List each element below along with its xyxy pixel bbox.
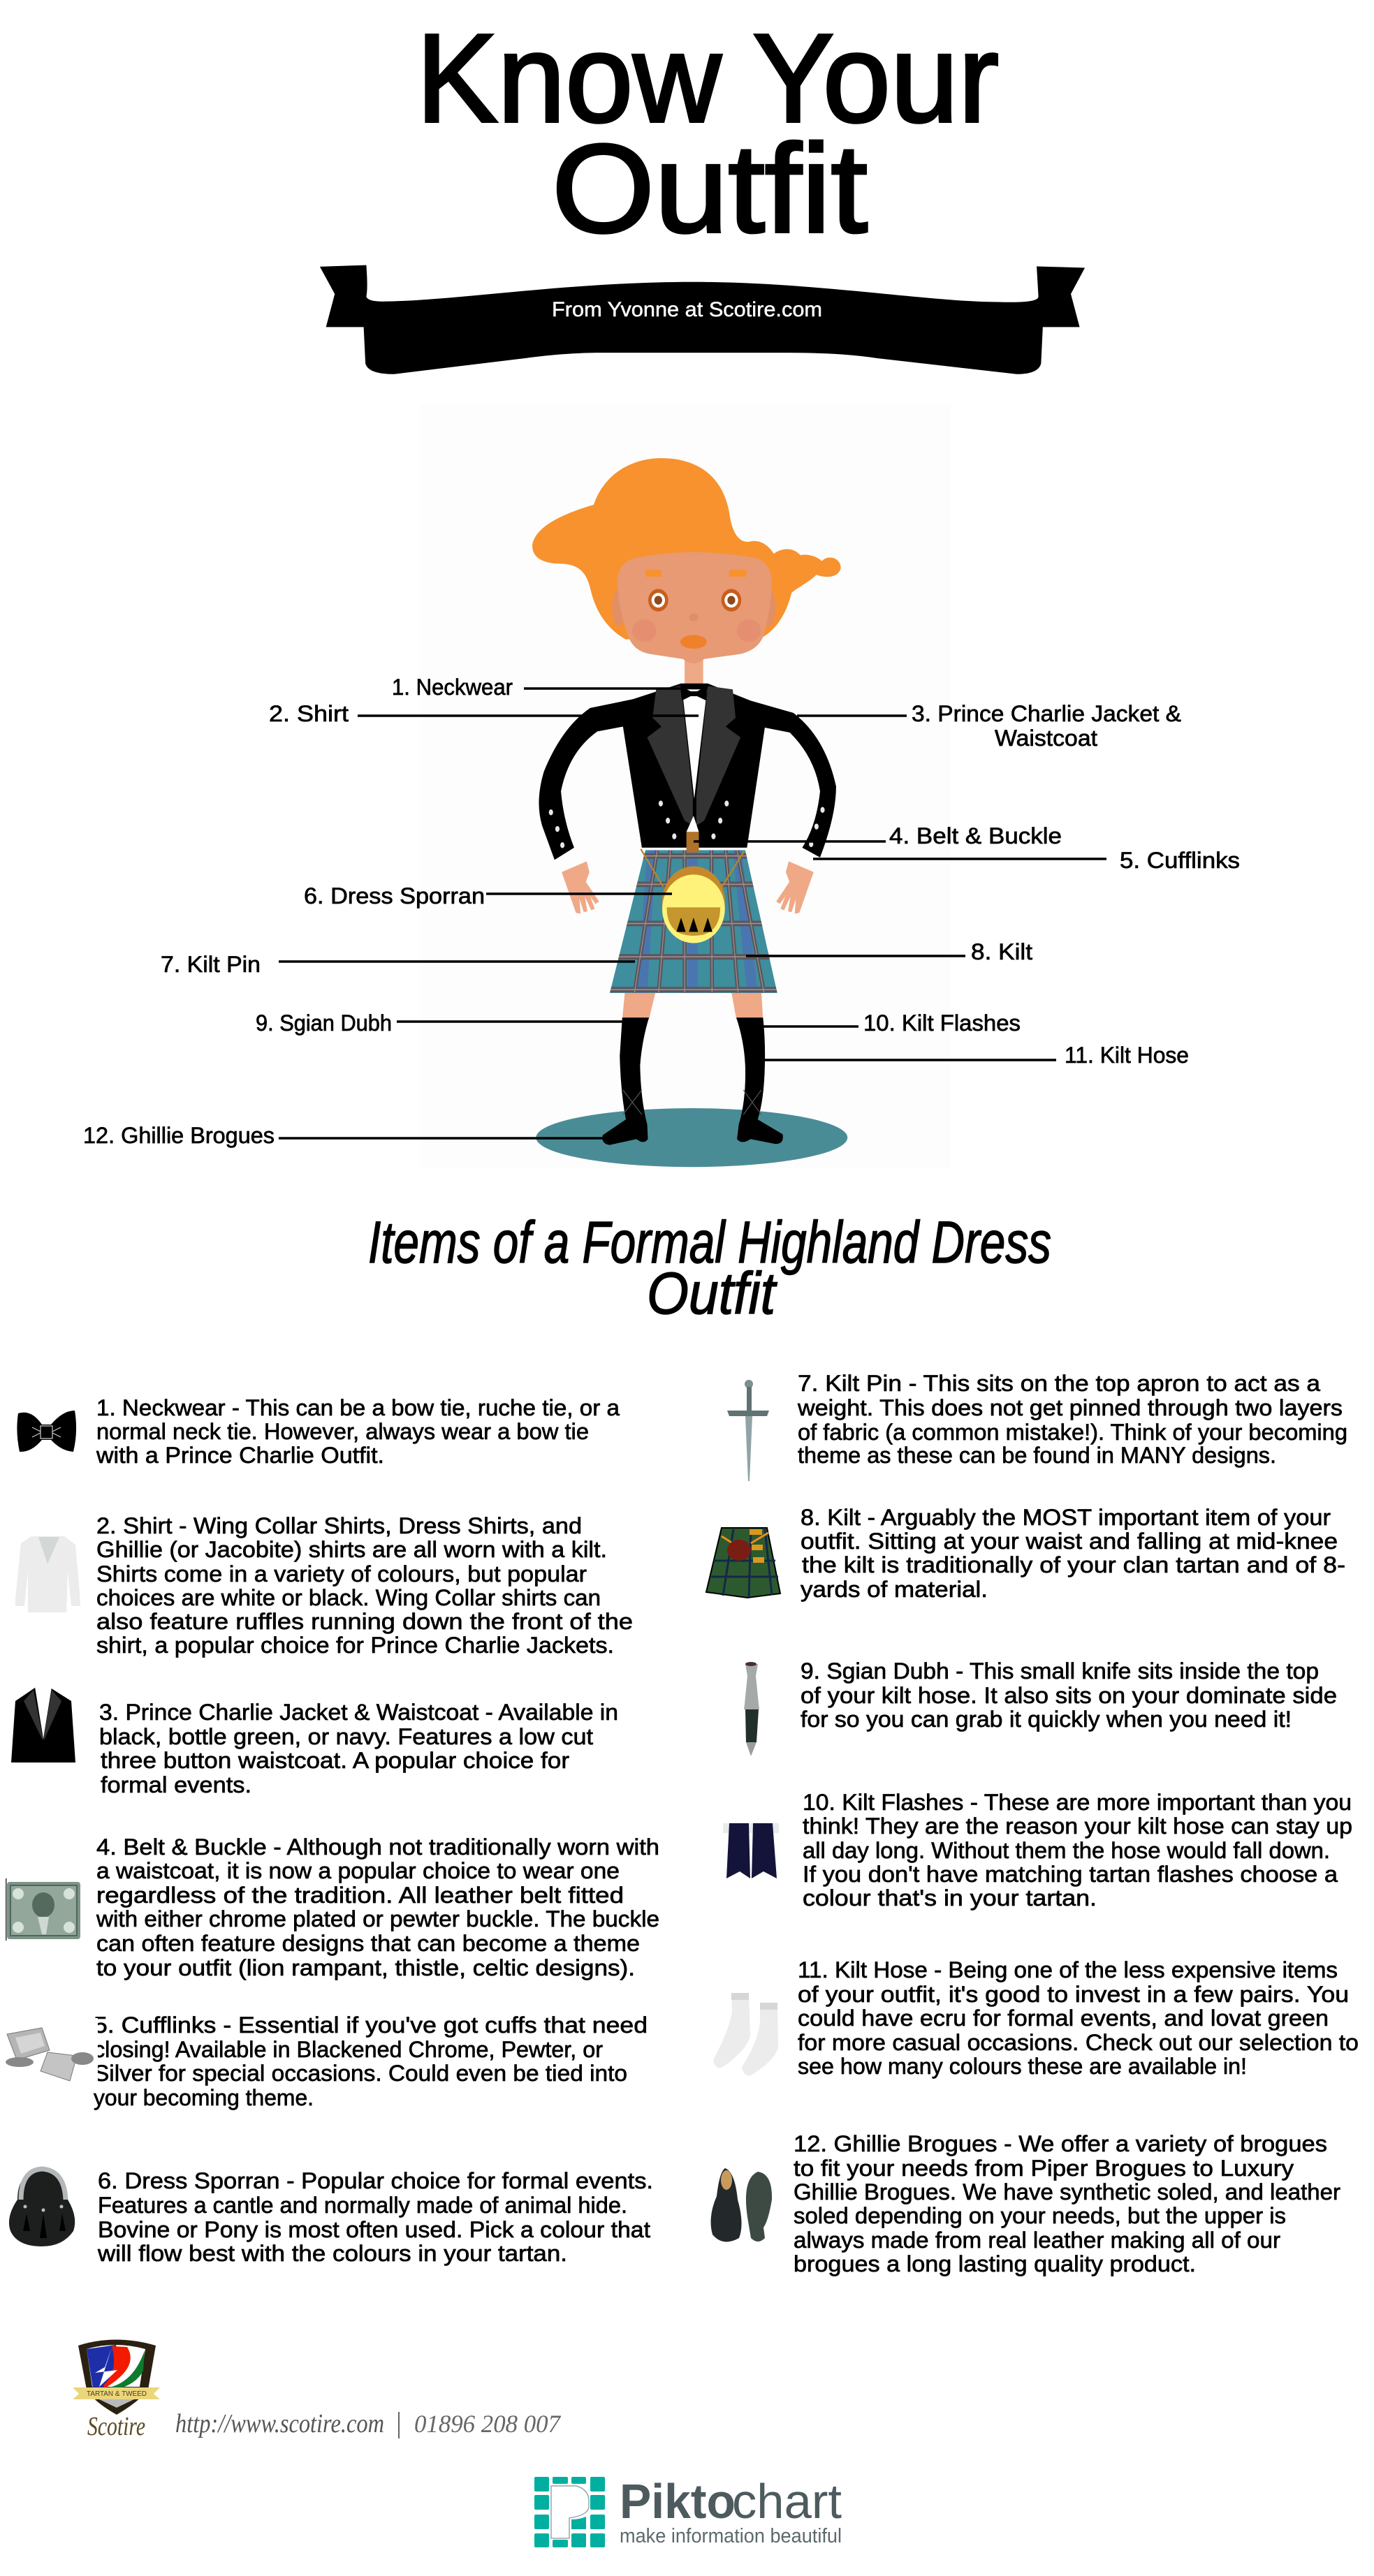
item 11: kilt hose: could have ecru for formal events, and lovat green bbox=[798, 2005, 1329, 2031]
item 12: ghillie brogues: brogues a long lasting quality product. bbox=[794, 2251, 1196, 2276]
label: 4. Belt & Buckle: 4. Belt & Buckle bbox=[889, 823, 1062, 848]
label: 3. Prince Charlie Jacket & Waistcoat: Waistcoat bbox=[995, 726, 1097, 751]
cheeks bbox=[632, 619, 657, 642]
ground shadow bbox=[536, 1108, 847, 1167]
item 2: shirt: shirt, a popular choice for Prince Charlie Jackets. bbox=[96, 1633, 614, 1658]
waistcoat point bbox=[687, 816, 699, 832]
item 4: belt and buckle: to your outfit (lion rampant, thistle, celtic designs). bbox=[96, 1955, 635, 1980]
item 6: dress sporran: Features a cantle and normally made of animal hide. bbox=[98, 2193, 627, 2218]
icon: shirt bbox=[15, 1536, 80, 1612]
bow tie bbox=[680, 686, 707, 700]
item 1: neckwear: with a Prince Charlie Outfit. bbox=[96, 1443, 384, 1468]
scotire logo: TARTAN & TWEED bbox=[87, 2390, 147, 2398]
item 12: ghillie brogues: soled depending on your needs, but the upper is bbox=[794, 2203, 1286, 2228]
item 2: shirt: Shirts come in a variety of colours, but popular bbox=[96, 1561, 587, 1587]
label: 7. Kilt Pin: 7. Kilt Pin bbox=[161, 952, 261, 977]
item 4: belt and buckle: 4. Belt & Buckle - Although not traditionally worn with bbox=[96, 1834, 659, 1860]
icon: bow tie bbox=[17, 1411, 76, 1452]
label: 3. Prince Charlie Jacket & Waistcoat bbox=[797, 701, 1181, 751]
label: 12. Ghillie Brogues: 12. Ghillie Brogues bbox=[83, 1123, 275, 1148]
icon: sporran bbox=[9, 2169, 75, 2246]
contact line bbox=[175, 2409, 562, 2438]
label: 3. Prince Charlie Jacket & Waistcoat: 3. Prince Charlie Jacket & bbox=[912, 701, 1181, 726]
item 9: sgian dubh: for so you can grab it quickly when you need it! bbox=[801, 1707, 1292, 1732]
nose and mouth bbox=[689, 613, 698, 621]
ears bbox=[613, 589, 625, 626]
wordmark: chart bbox=[732, 2474, 842, 2529]
lapels bbox=[648, 686, 740, 825]
section heading bbox=[368, 1209, 1051, 1326]
item 2: shirt: Ghillie (or Jacobite) shirts are all worn with a kilt. bbox=[96, 1537, 607, 1562]
item 2: shirt bbox=[15, 1513, 633, 1658]
face bbox=[617, 552, 772, 663]
kilt bbox=[608, 848, 779, 994]
item 5: cufflinks: Silver for special occasions. Could even be tied into bbox=[94, 2061, 627, 2086]
item 9: sgian dubh bbox=[744, 1658, 1337, 1756]
item 7: kilt pin: theme as these can be found in MANY designs. bbox=[798, 1443, 1276, 1468]
item 9: sgian dubh: 9. Sgian Dubh - This small knife sits inside the top bbox=[801, 1658, 1319, 1684]
item 6: dress sporran: Bovine or Pony is most often used. Pick a colour that bbox=[98, 2217, 650, 2242]
banner bbox=[320, 265, 1085, 374]
item 1: neckwear bbox=[17, 1395, 620, 1468]
scotire logo: Scotire bbox=[87, 2412, 145, 2441]
label: 10. Kilt Flashes: 10. Kilt Flashes bbox=[863, 1010, 1021, 1036]
buttons bbox=[549, 800, 825, 848]
sporran bbox=[641, 849, 744, 887]
item 8: kilt: outfit. Sitting at your waist and falling at mid-knee bbox=[801, 1529, 1338, 1554]
item 3: jacket: black, bottle green, or navy. Features a low cut bbox=[99, 1724, 593, 1749]
item 12: ghillie brogues: Ghillie Brogues. We have synthetic soled, and leather bbox=[794, 2179, 1340, 2205]
figure backdrop panel bbox=[421, 404, 951, 1169]
item 2: shirt: also feature ruffles running down the front of the bbox=[96, 1609, 633, 1634]
item 5: cufflinks: 5. Cufflinks - Essential if you've got cuffs that need bbox=[94, 2012, 648, 2038]
label: 11. Kilt Hose: 11. Kilt Hose bbox=[1065, 1043, 1189, 1068]
item 12: ghillie brogues: 12. Ghillie Brogues - We offer a variety of brogues bbox=[794, 2131, 1327, 2156]
item 1: neckwear: normal neck tie. However, always wear a bow tie bbox=[96, 1419, 589, 1444]
icon: piktochart mark bbox=[534, 2477, 605, 2547]
item 12: ghillie brogues: to fit your needs from Piper Brogues to Luxury bbox=[794, 2156, 1294, 2181]
item 10: kilt flashes: colour that's in your tartan. bbox=[803, 1885, 1097, 1911]
item 11: kilt hose bbox=[713, 1957, 1359, 2079]
label: 6. Dress Sporran: 6. Dress Sporran bbox=[304, 883, 485, 908]
item 5: cufflinks bbox=[0, 2012, 648, 2110]
contact line: 01896 208 007 bbox=[414, 2410, 562, 2438]
shirt front bbox=[682, 689, 707, 799]
item 12: ghillie brogues bbox=[711, 2131, 1340, 2276]
item 2: shirt: choices are white or black. Wing Collar shirts can bbox=[96, 1585, 601, 1610]
item 4: belt and buckle: regardless of the tradition. All leather belt fitted bbox=[96, 1883, 624, 1908]
item 10: kilt flashes: 10. Kilt Flashes - These are more important than you bbox=[803, 1790, 1352, 1815]
icon: belt buckle bbox=[6, 1878, 80, 1941]
item 8: kilt bbox=[706, 1505, 1345, 1602]
contact line: http://www.scotire.com bbox=[175, 2409, 384, 2438]
hair bbox=[532, 458, 841, 640]
item 10: kilt flashes bbox=[723, 1790, 1352, 1911]
title: Know Your bbox=[416, 8, 999, 149]
title bbox=[416, 8, 999, 259]
item 11: kilt hose: of your outfit, it's good to invest in a few pairs. You bbox=[798, 1982, 1349, 2007]
eyes bbox=[648, 589, 668, 612]
wordmark: Pikto bbox=[620, 2474, 736, 2529]
item 9: sgian dubh: of your kilt hose. It also sits on your dominate side bbox=[801, 1683, 1337, 1708]
item 3: jacket: 3. Prince Charlie Jacket & Waistcoat - Available in bbox=[99, 1700, 618, 1725]
wordmark bbox=[620, 2474, 842, 2547]
icon: prince charlie jacket bbox=[11, 1687, 75, 1762]
icon: kilt flashes bbox=[723, 1823, 779, 1878]
item 11: kilt hose: see how many colours these are available in! bbox=[798, 2054, 1247, 2079]
item 8: kilt: yards of material. bbox=[801, 1577, 988, 1602]
item 4: belt and buckle bbox=[6, 1834, 659, 1980]
item 2: shirt: 2. Shirt - Wing Collar Shirts, Dress Shirts, and bbox=[96, 1513, 582, 1538]
scotire logo bbox=[73, 2339, 160, 2441]
title: Outfit bbox=[552, 119, 868, 259]
legs bbox=[622, 989, 763, 1019]
item 1: neckwear: 1. Neckwear - This can be a bow tie, ruche tie, or a bbox=[96, 1395, 620, 1420]
label: 2. Shirt: 2. Shirt bbox=[269, 701, 349, 726]
section heading: Outfit bbox=[647, 1260, 777, 1326]
item 10: kilt flashes: think! They are the reason your kilt hose can stay up bbox=[803, 1813, 1352, 1839]
item 6: dress sporran: will flow best with the colours in your tartan. bbox=[97, 2241, 567, 2266]
item 10: kilt flashes: all day long. Without them the hose would fall down. bbox=[803, 1838, 1330, 1863]
item 5: cufflinks: closing! Available in Blackened Chrome, Pewter, or bbox=[94, 2037, 603, 2062]
label: 9. Sgian Dubh: 9. Sgian Dubh bbox=[256, 1010, 392, 1036]
item 10: kilt flashes: If you don't have matching tartan flashes choose a bbox=[803, 1862, 1338, 1887]
item 8: kilt: 8. Kilt - Arguably the MOST important item of your bbox=[801, 1505, 1331, 1530]
icon: brogues bbox=[711, 2168, 772, 2242]
eyebrows bbox=[645, 570, 662, 577]
item 7: kilt pin: of fabric (a common mistake!). Think of your becoming bbox=[798, 1420, 1347, 1445]
neck bbox=[685, 654, 703, 686]
item 7: kilt pin bbox=[727, 1371, 1347, 1481]
item 3: jacket bbox=[11, 1687, 618, 1797]
item 3: jacket: three button waistcoat. A popular choice for bbox=[101, 1748, 569, 1773]
icon: cufflinks bbox=[0, 2018, 98, 2085]
section heading: Items of a Formal Highland Dress bbox=[368, 1209, 1051, 1275]
item 7: kilt pin: 7. Kilt Pin - This sits on the top apron to act as a bbox=[798, 1371, 1320, 1396]
piktochart logo bbox=[534, 2474, 842, 2547]
illustration: man in highland dress bbox=[532, 458, 847, 1167]
belt buckle bbox=[687, 832, 699, 853]
item 6: dress sporran bbox=[9, 2168, 653, 2266]
item 6: dress sporran: 6. Dress Sporran - Popular choice for formal events. bbox=[98, 2168, 653, 2193]
item 4: belt and buckle: with either chrome plated or pewter buckle. The buckle bbox=[96, 1906, 659, 1931]
item 11: kilt hose: for more casual occasions. Check out our selection to bbox=[798, 2030, 1359, 2055]
jacket bbox=[539, 684, 836, 860]
item 3: jacket: formal events. bbox=[101, 1772, 251, 1797]
label: 5. Cufflinks: 5. Cufflinks bbox=[1120, 848, 1240, 873]
item 12: ghillie brogues: always made from real leather making all of our bbox=[794, 2228, 1280, 2253]
icon: sgian dubh bbox=[744, 1662, 759, 1756]
hands bbox=[562, 861, 599, 914]
icon: kilt pin sword bbox=[727, 1380, 769, 1481]
wordmark: make information beautiful bbox=[620, 2525, 842, 2547]
item 11: kilt hose: 11. Kilt Hose - Being one of the less expensive items bbox=[798, 1957, 1338, 1982]
hose and brogues bbox=[602, 1017, 783, 1145]
item 7: kilt pin: weight. This does not get pinned through two layers bbox=[797, 1395, 1343, 1420]
icon: kilt hose socks bbox=[713, 1993, 778, 2075]
item 5: cufflinks: your becoming theme. bbox=[94, 2085, 314, 2110]
label: 8. Kilt: 8. Kilt bbox=[971, 939, 1032, 964]
icon: kilt bbox=[706, 1528, 780, 1598]
label: 1. Neckwear: 1. Neckwear bbox=[392, 675, 513, 700]
item 4: belt and buckle: can often feature designs that can become a theme bbox=[96, 1931, 640, 1956]
item 4: belt and buckle: a waistcoat, it is now a popular choice to wear one bbox=[96, 1858, 620, 1883]
banner: From Yvonne at Scotire.com bbox=[552, 298, 822, 321]
item 8: kilt: the kilt is traditionally of your clan tartan and of 8- bbox=[802, 1552, 1345, 1577]
